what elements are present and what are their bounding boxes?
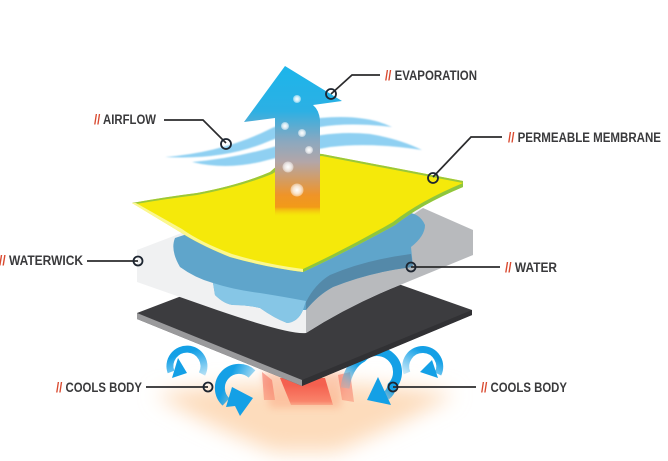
label: waterwick [0, 253, 142, 268]
label: airflow: // AIRFLOW [94, 112, 156, 127]
black base layer [137, 250, 472, 386]
circulation arrows left [170, 349, 253, 416]
label: evaporation: // EVAPORATION [385, 68, 477, 83]
body heat glow [155, 372, 455, 452]
airflow lines [165, 117, 422, 166]
label: cools body right: // COOLS BODY [481, 380, 567, 395]
label: cools body left: // COOLS BODY [56, 380, 142, 395]
water [173, 210, 425, 323]
label: cools body left [56, 380, 212, 395]
evaporation arrow [244, 66, 342, 216]
waterwick layer [137, 208, 473, 333]
label: waterwick: // WATERWICK [0, 253, 83, 268]
label: water [406, 260, 557, 275]
label: airflow [94, 112, 231, 149]
label: permeable membrane [428, 130, 661, 183]
yellow permeable membrane [132, 154, 463, 272]
circulation arrows right [345, 350, 440, 405]
label: water: // WATER [505, 260, 557, 275]
label: evaporation [326, 68, 477, 99]
label: cools body right [388, 380, 567, 395]
